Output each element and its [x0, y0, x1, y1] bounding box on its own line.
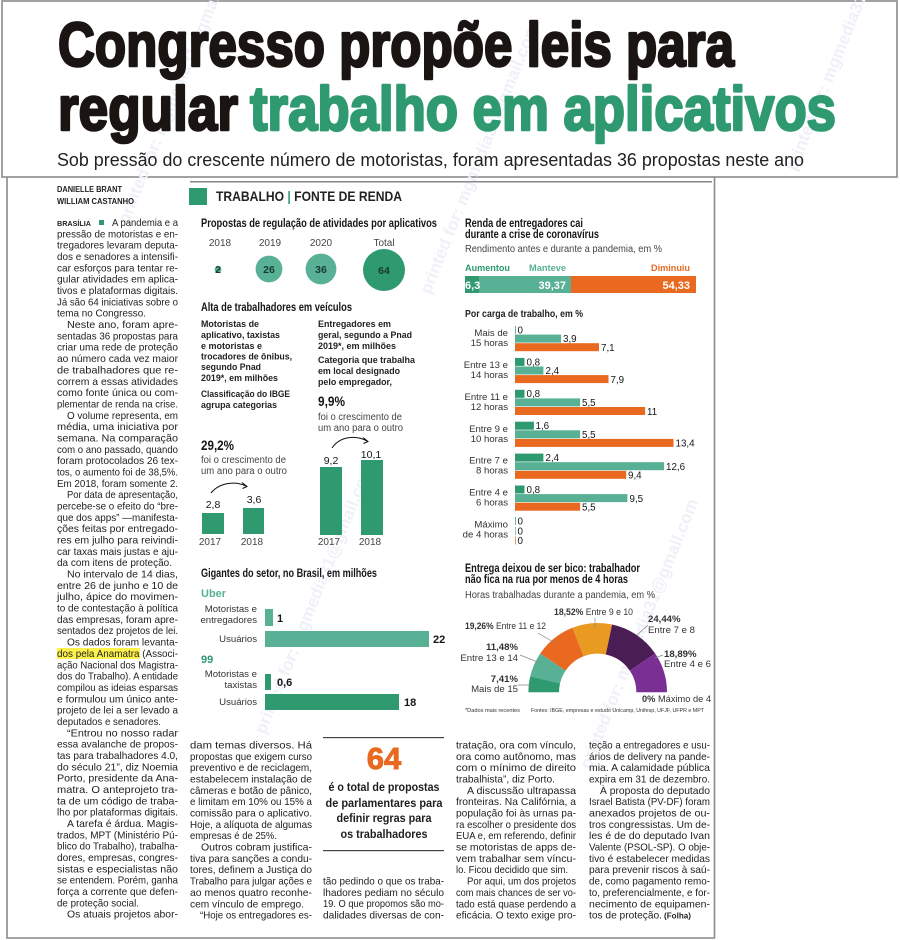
panel: alta de trabalhadores: trocadores de ônibus,	[201, 350, 292, 362]
subtitle: Sob pressão do crescente número de motoristas, foram apresentadas 36 propostas neste ano	[57, 149, 804, 170]
chart: por carga de trabalho: Entre 9 e	[469, 424, 508, 435]
article column 1: A tarefa é árdua. Magis-	[67, 819, 178, 830]
article column 1: dos pela Anamatra (Associ-	[57, 649, 178, 660]
article column 2: Hoje, a alíquota de algumas	[190, 820, 312, 831]
article column 1: tregadores levaram deputa-	[57, 241, 178, 252]
article column 1: criar uma rede de proteção	[57, 343, 178, 354]
panel: gigantes do setor: taxistas	[224, 680, 257, 691]
title: regular	[58, 75, 238, 144]
article column 1: lho por plataformas digitais.	[57, 808, 178, 819]
chart: por carga de trabalho: 2,4	[546, 453, 560, 464]
chart labels: semicircle: Mais de 15	[471, 684, 518, 695]
watermark: printed for: mgmedia31@gmail.com	[251, 461, 377, 736]
panel: gigantes do setor: 1	[277, 613, 283, 625]
article column 1: Porto, presidente da Ana-	[57, 774, 178, 785]
chart: por carga de trabalho: Mais de	[474, 328, 508, 339]
chart labels: semicircle: 18,89%	[664, 649, 697, 660]
article column 1: car taxas mais justas e aju-	[57, 547, 178, 558]
article column 1: das empresas, foram apre-	[57, 615, 178, 626]
article column 2: câmeras e botão de pânico,	[190, 786, 312, 797]
panel: renda de entregadores: Rendimento antes e durante a pandemia, em %	[465, 244, 662, 255]
article column 5: tos de proteção.	[589, 911, 662, 922]
article column 4: tado está quase perdendo a	[456, 899, 576, 910]
article column 2: ao menos quatro reconhe-	[190, 888, 312, 899]
chart: por carga de trabalho: de 4 horas	[463, 529, 508, 540]
article column 1: tema no Congresso.	[57, 309, 146, 320]
panel: propostas circles: 36	[315, 264, 327, 276]
article column 1: projeto de lei a ser levado a	[57, 706, 178, 717]
chart: semicircle hours worked	[518, 618, 667, 692]
article column 1	[56, 218, 179, 921]
article column 1: Por data de apresentação,	[67, 490, 178, 501]
title: Congresso propõe leis para	[58, 11, 734, 80]
chart: por carga de trabalho: 7,1	[601, 343, 615, 354]
article column 5: ários de delivery na pande-	[589, 752, 710, 763]
article column 1: Já são 64 iniciativas sobre o	[57, 297, 178, 308]
article column 4: ora como autônomo, mas	[456, 752, 576, 763]
chart: por carga de trabalho: Por carga de trabalho, em %	[465, 309, 583, 320]
chart labels: semicircle: Entre 4 e 6	[664, 659, 711, 670]
article column 2: estabelecem instalação de	[190, 774, 312, 786]
article column 2: e limitam em 10% ou 15% a	[190, 797, 312, 808]
article column 5: (Folha)	[664, 912, 691, 921]
panel: entrega deixou de ser bico: não fica na rua por menos de 4 horas	[465, 573, 628, 586]
chart labels: semicircle: 19,26% Entre 11 e 12	[465, 621, 546, 632]
panel: gigantes do setor: Motoristas e	[205, 669, 257, 680]
panel: gigantes do setor	[200, 567, 445, 710]
panel: gigantes do setor: entregadores	[200, 615, 257, 626]
chart: por carga de trabalho: 15 horas	[471, 338, 508, 349]
panel: renda de entregadores: Renda de entregadores cai	[465, 217, 583, 230]
article column 2: cem vínculo de emprego.	[190, 899, 304, 910]
panel: gigantes do setor: Usuários	[219, 634, 257, 645]
chart: por carga de trabalho: 14 horas	[471, 370, 508, 381]
article column 1: sistas e especialistas não	[57, 864, 178, 875]
chart labels: semicircle: 7,41%	[491, 674, 518, 685]
chart: por carga de trabalho: 5,5	[582, 502, 596, 514]
article column 1: tivos e plataformas digitais.	[57, 286, 178, 297]
article column 1: ta de um código de traba-	[57, 796, 178, 807]
article column 1: deputados e senadores.	[57, 717, 161, 728]
article column 5: Valente (PSOL-SP). O obje-	[589, 843, 710, 854]
article column 4: tratação, ora com vínculo,	[456, 740, 576, 752]
article column 1: ções feitas por entregado-	[57, 524, 178, 535]
panel: alta de trabalhadores: Alta de trabalhadores em veículos	[201, 301, 352, 314]
article column 2: tores, definem a Justiça do	[190, 865, 312, 876]
article column 1: julho, ápice do movimen-	[56, 592, 178, 603]
article column 4: Por aqui, um dos projetos	[467, 877, 576, 888]
panel: alta de trabalhadores: 2,8	[206, 499, 220, 511]
article column 1: percebe-se o efeito do “bre-	[57, 502, 178, 512]
panel: gigantes do setor: Motoristas e	[205, 604, 257, 615]
panel: alta de trabalhadores: em local designado	[318, 365, 400, 376]
chart labels: semicircle: 11,48%	[486, 642, 518, 653]
chart labels: semicircle: Entre 7 e 8	[648, 625, 695, 636]
article column 1: sentadas 36 propostas para	[57, 331, 178, 342]
article column 1: dores, empresas, congres-	[57, 853, 178, 864]
article column 1: matra. O anteprojeto tra-	[57, 785, 178, 796]
panel: propostas circles	[201, 217, 437, 291]
chart: por carga de trabalho: 0,8	[526, 358, 541, 368]
panel: alta de trabalhadores: foi o crescimento de	[318, 412, 402, 423]
panel: propostas circles: Propostas de regulação de atividades por aplicativos	[201, 217, 437, 230]
article column 1: trados, MPT (Ministério Pú-	[57, 830, 178, 841]
panel: propostas circles: 2018	[209, 238, 232, 249]
article column 5: necimento de equipamen-	[589, 899, 710, 910]
panel: renda de entregadores	[465, 217, 696, 293]
panel: alta de trabalhadores: 2017	[318, 537, 341, 548]
article column 4	[456, 740, 576, 922]
article column 4: lo. Ficou decidido que sim.	[456, 865, 568, 876]
byline: DANIELLE BRANT	[57, 185, 122, 194]
callout: 64 propostas: os trabalhadores	[340, 827, 428, 841]
section header: TRABALHO | FONTE DE RENDA	[216, 188, 402, 204]
chart: por carga de trabalho: 1,6	[536, 421, 550, 432]
article column 1: que dos apps” —manifesta-	[57, 513, 178, 524]
article column 1: gular atividades em aplica-	[57, 275, 178, 286]
panel: propostas circles: 26	[263, 264, 275, 276]
chart: por carga de trabalho: 13,4	[676, 438, 695, 450]
article column 1: O volume representa, em	[67, 411, 178, 422]
article column 1: tos, o aumento foi de 38,5%.	[57, 468, 178, 478]
article column 1: foram protocolados 26 tex-	[57, 456, 178, 467]
article column 3: 19. O que propomos são mo-	[323, 899, 444, 910]
article column 3: dalidades diversas de con-	[323, 911, 444, 922]
panel: renda de entregadores: Aumentou	[465, 263, 510, 274]
chart: por carga de trabalho: 7,9	[610, 375, 624, 386]
panel: alta de trabalhadores: 9,2	[324, 455, 338, 467]
article column 3: lhadores pediam no século	[323, 888, 444, 899]
panel: gigantes do setor: Gigantes do setor, no Brasil, em milhões	[201, 567, 377, 580]
footnote and sources: *Dados mais recentes	[465, 708, 520, 714]
article column 1: sentados dez projetos de lei.	[57, 626, 178, 637]
panel: propostas circles: 2019	[259, 238, 282, 249]
article column 1: plementar de renda na crise.	[57, 399, 178, 410]
chart: por carga de trabalho: 0	[518, 326, 524, 336]
chart: por carga de trabalho: 12,6	[666, 462, 686, 473]
panel: alta de trabalhadores: 2018	[359, 537, 382, 548]
panel: alta de trabalhadores: Entregadores em	[318, 318, 391, 329]
panel: propostas circles: Total	[373, 238, 395, 249]
chart labels: semicircle	[460, 607, 712, 705]
article column 5: expira em 31 de dezembro.	[589, 774, 710, 786]
article column 2: preventivo e de reciclagem,	[190, 763, 312, 774]
chart: por carga de trabalho: Máximo	[474, 519, 508, 530]
panel: renda de entregadores: 54,33	[662, 280, 690, 292]
article column 4: com mais chances de ser vo-	[456, 888, 576, 899]
article column 1: essa avalanche de propos-	[57, 740, 178, 751]
article column 4: eficácia. O texto exige pro-	[456, 911, 576, 922]
article column 5	[589, 740, 710, 922]
panel: alta de trabalhadores	[199, 301, 416, 548]
article column 2: empresas é de 25%.	[190, 831, 277, 842]
chart: por carga de trabalho: 12 horas	[471, 402, 508, 413]
article column 1: Os dados foram levanta-	[67, 638, 178, 649]
chart: por carga de trabalho: Entre 11 e	[464, 392, 508, 403]
panel: renda de entregadores: 6,3	[465, 280, 480, 292]
panel: entrega deixou de ser bico: Horas trabalhadas durante a pandemia, em %	[465, 590, 655, 601]
panel: entrega deixou de ser bico	[465, 562, 655, 601]
article column 1: car esforços para tentar re-	[57, 263, 178, 274]
callout: 64 propostas: é o total de propostas	[328, 780, 440, 794]
article column 2: propostas que exigem curso	[190, 752, 312, 763]
article column 4: ra escolher o presidente dos	[456, 820, 576, 831]
article column 5: anexados projetos de ou-	[589, 808, 710, 820]
chart: por carga de trabalho: 6 horas	[476, 498, 508, 508]
chart: por carga de trabalho: 10 horas	[471, 434, 508, 445]
article column 1: da com itens de proteção.	[57, 558, 172, 569]
article column 2: tiva para sanções a condu-	[190, 854, 312, 865]
chart: por carga de trabalho: 0	[518, 536, 524, 547]
panel: entrega deixou de ser bico: Entrega deixou de ser bico: trabalhador	[465, 562, 640, 575]
article column 5: to, preferencialmente, e for-	[589, 888, 710, 899]
article column 1: dos e senadores a intensifi-	[57, 252, 178, 263]
panel: alta de trabalhadores: 3,6	[247, 494, 261, 506]
chart: por carga de trabalho	[463, 309, 695, 547]
panel: alta de trabalhadores: pelo empregador,	[318, 376, 392, 387]
article column 5: Israel Batista (PV-DF) foram	[589, 797, 710, 808]
panel: gigantes do setor: Usuários	[219, 697, 257, 708]
panel: propostas circles: 2	[215, 264, 221, 276]
article column 1: como fonte única ou com-	[57, 388, 178, 399]
article column 5: teção a entregadores e usu-	[589, 740, 710, 752]
article column 4: com o mínimo de direito	[456, 763, 576, 774]
article column 5: mia. A calamidade pública	[589, 763, 710, 774]
article column 2: comissão para o aplicativo.	[190, 808, 312, 820]
panel: renda de entregadores: Diminuiu	[651, 263, 690, 274]
article column 1: se entendem. Porém, ganha	[57, 876, 178, 887]
panel: alta de trabalhadores: 2019*, em milhões	[201, 372, 278, 383]
watermark: printed for: mgmedia31@gmail.com	[416, 21, 542, 296]
chart: por carga de trabalho: 5,5	[582, 430, 596, 441]
article column 1: Os atuais projetos abor-	[67, 910, 178, 921]
panel: gigantes do setor: Uber	[201, 588, 227, 600]
article column 1: A pandemia e a	[112, 218, 178, 229]
panel: renda de entregadores: 39,37	[538, 280, 566, 292]
chart labels: semicircle: 0% Máximo de 4	[642, 694, 712, 705]
chart: por carga de trabalho: 11	[647, 407, 657, 418]
article column 1: pressão de motoristas e en-	[57, 229, 178, 240]
chart: por carga de trabalho: Entre 7 e	[469, 456, 508, 467]
article column 5: tivo é estabelecer medidas	[589, 854, 710, 865]
article column 1: semana. Na comparação	[57, 434, 178, 444]
callout: 64 propostas: 64	[367, 741, 402, 776]
callout: 64 propostas	[323, 737, 444, 851]
chart: por carga de trabalho: 0,8	[526, 389, 541, 400]
footnote and sources	[465, 708, 705, 714]
article column 4: EUA e, em referendo, definir	[456, 831, 576, 842]
article column 2: Trabalho para julgar ações e	[190, 877, 312, 888]
chart labels: semicircle: 18,52% Entre 9 e 10	[554, 607, 633, 618]
chart: por carga de trabalho: 9,4	[628, 470, 642, 482]
article column 5: de, como pagamento remo-	[589, 877, 710, 888]
chart: por carga de trabalho: Entre 4 e	[469, 488, 508, 498]
panel: alta de trabalhadores: segundo Pnad	[201, 361, 261, 372]
chart: por carga de trabalho: 0	[518, 526, 524, 538]
article column 1: força a corrente que defen-	[57, 887, 178, 898]
panel: propostas circles: 64	[378, 265, 390, 277]
watermark	[114, 0, 900, 771]
article column 4: A discussão ultrapassa	[467, 786, 576, 797]
chart: por carga de trabalho: 8 horas	[476, 466, 508, 477]
panel: gigantes do setor: 99	[201, 654, 213, 666]
watermark: printed for: mgmedia31@gmail.com	[576, 496, 702, 771]
panel: alta de trabalhadores: geral, segundo a Pnad	[318, 329, 412, 340]
panel: alta de trabalhadores: Categoria que trabalha	[318, 354, 416, 365]
article column 1: to de contestação à política	[57, 604, 178, 615]
article column 1: de proteção social.	[57, 898, 139, 909]
chart: por carga de trabalho: 3,9	[563, 334, 577, 345]
panel: alta de trabalhadores: 29,2%	[201, 437, 234, 453]
panel: alta de trabalhadores: um ano para o outro	[201, 466, 287, 477]
panel: alta de trabalhadores: 2017	[199, 537, 222, 548]
byline: WILLIAM CASTANHO	[57, 197, 134, 206]
article column 2: Outros cobram justifica-	[201, 843, 312, 854]
section header	[189, 181, 712, 205]
byline	[57, 185, 134, 206]
article column 1: e formulou um único ante-	[57, 694, 178, 705]
chart labels: semicircle: 24,44%	[648, 614, 681, 625]
title	[58, 11, 836, 144]
article column 1: “Entrou no nosso radar	[67, 728, 179, 739]
article column 5: À proposta do deputado	[600, 784, 710, 797]
article column 1: média, uma iniciativa por	[57, 422, 179, 433]
article column 1: correm a essas atividades	[57, 377, 178, 388]
chart: por carga de trabalho: 2,4	[546, 366, 560, 377]
article column 1: ação Nacional dos Magistra-	[57, 660, 178, 671]
panel: alta de trabalhadores: foi o crescimento de	[201, 455, 286, 466]
article column 4: fronteiras. Na Califórnia, a	[456, 797, 576, 808]
chart: por carga de trabalho: Entre 13 e	[464, 360, 508, 371]
callout: 64 propostas: de parlamentares para	[326, 796, 443, 810]
article column 4: população foi às urnas pa-	[456, 808, 576, 820]
article column 1: com o ano passado, quando	[57, 445, 178, 456]
article column 1: compilou as ideias esparsas	[57, 683, 178, 694]
article column 5: tros congressistas. Um de-	[589, 820, 710, 831]
article column 1: Neste ano, foram apre-	[67, 320, 178, 331]
panel: gigantes do setor: 18	[404, 697, 416, 709]
article column 3: tão pedindo o que os traba-	[323, 876, 444, 888]
chart labels: semicircle: Entre 13 e 14	[460, 653, 519, 664]
panel: alta de trabalhadores: Classificação do IBGE	[201, 388, 290, 399]
article column 4: vem trabalhar sem víncu-	[456, 854, 576, 865]
article column 5: para prevenir riscos à saú-	[589, 865, 710, 876]
article column 1: entre 26 de junho e 10 de	[57, 581, 178, 592]
article column 1: Em 2018, foram somente 2.	[57, 479, 178, 490]
panel: alta de trabalhadores: 2018	[241, 537, 264, 548]
article column 1: res em julho para reivindi-	[57, 536, 178, 546]
article column 4: trabalhista”, diz Porto.	[456, 774, 555, 786]
panel: propostas circles: 2020	[310, 238, 333, 249]
chart: por carga de trabalho: 0,8	[526, 485, 541, 496]
article column 1: tas para trabalhadores 4.0,	[57, 751, 178, 762]
panel: alta de trabalhadores: um ano para o outro	[318, 423, 403, 434]
article column 2: dam temas diversos. Há	[190, 740, 312, 752]
panel: gigantes do setor: 0,6	[277, 677, 292, 689]
article column 4: se motoristas de apps de-	[456, 843, 576, 854]
article column 2	[190, 740, 312, 922]
panel: alta de trabalhadores: aplicativo, taxistas	[201, 329, 280, 340]
article column 5: les é de do deputado Ivan	[589, 831, 710, 842]
panel: alta de trabalhadores: 2019*, em milhões	[318, 340, 396, 351]
article column 1: BRASÍLIA	[57, 219, 92, 228]
article column 2: “Hoje os entregadores es-	[200, 911, 312, 922]
panel: renda de entregadores: Manteve	[529, 263, 566, 274]
article column 1: dos do Trabalho). A entidade	[57, 672, 178, 683]
panel: alta de trabalhadores: 10,1	[361, 449, 381, 461]
article column 3	[323, 876, 444, 922]
chart: por carga de trabalho: 9,5	[630, 494, 644, 505]
article column 1: de trabalhadores que re-	[57, 365, 178, 376]
article column 1: ao número cada vez maior	[57, 354, 179, 365]
panel: gigantes do setor: 22	[433, 634, 445, 646]
footnote and sources: Fontes: IBGE, empresas e estudo Unicamp, Unifesp, UFJF, UFPR e MPT	[531, 708, 705, 714]
panel: renda de entregadores: durante a crise de coronavírus	[465, 228, 599, 241]
article column 1: No intervalo de 14 dias,	[67, 570, 178, 580]
panel: alta de trabalhadores: e motoristas e	[201, 340, 262, 351]
panel: alta de trabalhadores: Motoristas de	[201, 318, 259, 329]
article column 1: do século 21”, diz Noemia	[57, 762, 178, 773]
chart: por carga de trabalho: 5,5	[582, 398, 596, 409]
panel: alta de trabalhadores: agrupa categorias	[201, 399, 277, 410]
panel: alta de trabalhadores: 9,9%	[318, 393, 345, 409]
chart: por carga de trabalho: 0	[518, 516, 524, 528]
callout: 64 propostas: definir regras para	[336, 811, 432, 825]
article column 1: blico do Trabalho), trabalha-	[57, 842, 178, 853]
